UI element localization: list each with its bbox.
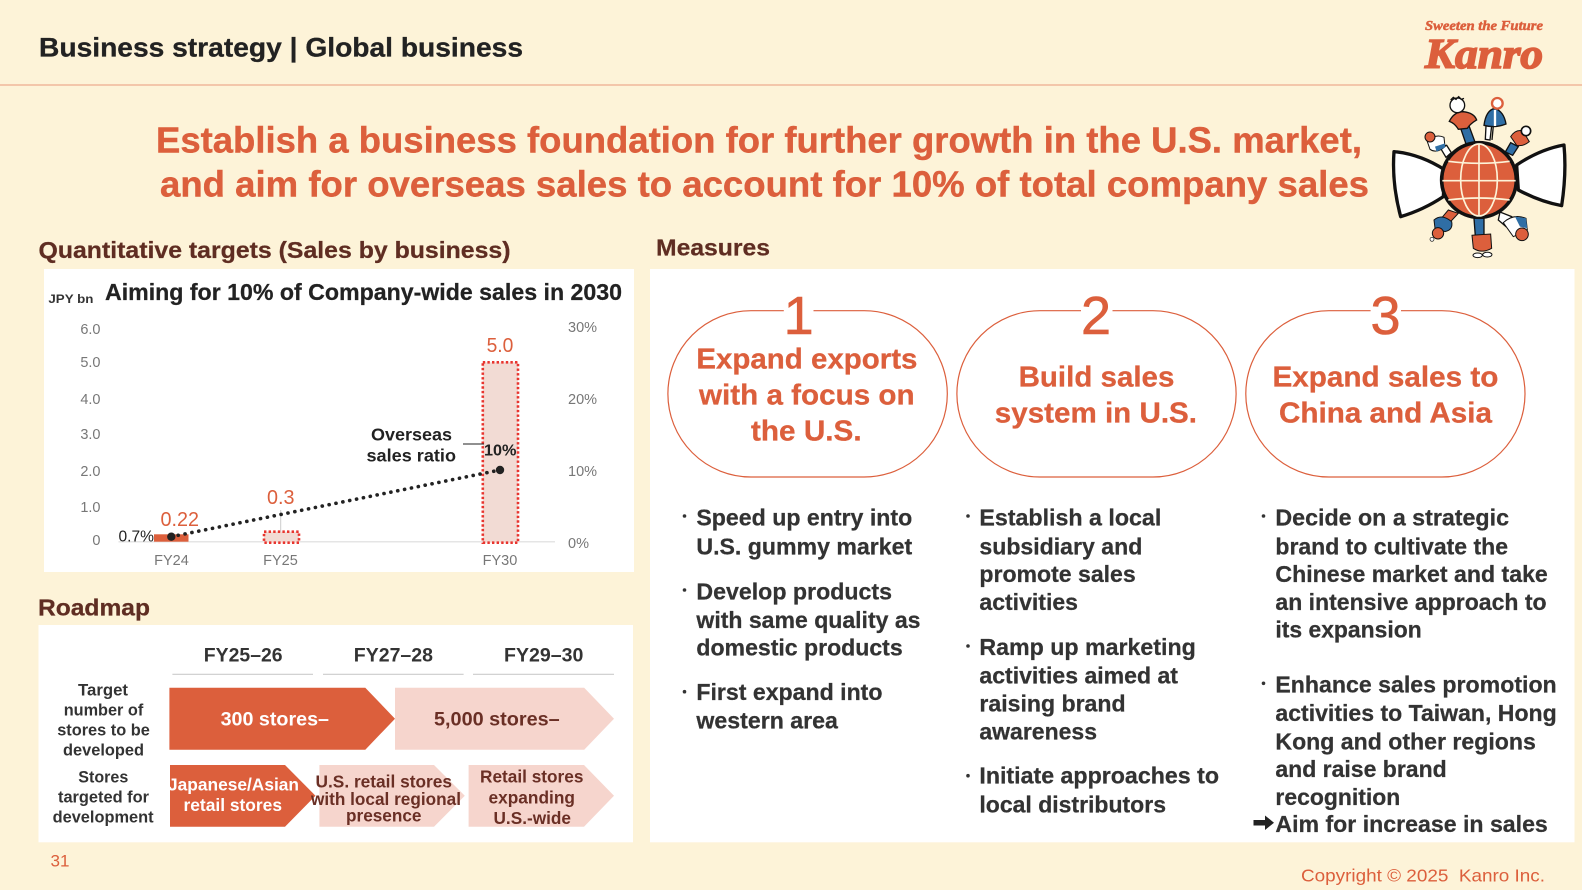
measure 2 bullets bbox=[966, 505, 1219, 818]
measure 3 bullets bbox=[1262, 505, 1557, 810]
copyright: Copyright © 2025 Kanro Inc. bbox=[1301, 866, 1545, 886]
measure 1 bullets: First expand into bbox=[696, 679, 882, 705]
bar: FY25 bbox=[264, 532, 299, 543]
bar: FY24 bbox=[154, 534, 188, 542]
icon: candy globe with people bbox=[1394, 97, 1565, 258]
page number: 31 bbox=[50, 852, 70, 870]
category labels: FY30 bbox=[483, 553, 517, 569]
headline bbox=[156, 120, 1369, 205]
measure 2 bullets: Establish a local bbox=[979, 505, 1161, 531]
row label: stores targeted: development bbox=[53, 808, 154, 826]
measure 1 header bbox=[668, 286, 947, 477]
row label: target number of stores bbox=[57, 682, 150, 759]
arrow: retail stores expanding: Retail stores bbox=[480, 766, 584, 786]
measure 2 header: 2 bbox=[1081, 286, 1111, 346]
measure 3 bullets: Decide on a strategic bbox=[1275, 505, 1509, 531]
measure 2 header: system in U.S. bbox=[995, 397, 1197, 429]
bar values: 0.3 bbox=[267, 487, 294, 509]
measure 3 bullets: Kong and other regions bbox=[1275, 728, 1536, 754]
measure 3 bullets: Enhance sales promotion bbox=[1275, 671, 1557, 697]
measure 2 header: Build sales bbox=[1019, 362, 1174, 394]
measure 1 header: Expand exports bbox=[696, 343, 917, 375]
arrow: Japanese/Asian retail stores: Japanese/Asian bbox=[168, 775, 299, 795]
roadmap period headers: FY27–28 bbox=[354, 645, 433, 667]
right axis labels: 0% bbox=[568, 536, 589, 552]
measure 2 bullets: raising brand bbox=[979, 690, 1126, 716]
right axis labels: 20% bbox=[568, 392, 597, 408]
bar values bbox=[160, 335, 513, 531]
measure 1 bullets: domestic products bbox=[696, 635, 903, 661]
measure 1 header: 1 bbox=[784, 286, 814, 346]
measure 3 bullets: its expansion bbox=[1275, 617, 1422, 643]
result text: Aim for increase in sales bbox=[1275, 811, 1548, 837]
arrow: U.S. retail stores: presence bbox=[346, 806, 422, 826]
arrow: 300 stores bbox=[169, 688, 395, 750]
right axis labels: 10% bbox=[568, 464, 597, 480]
measure 2 bullets: awareness bbox=[979, 718, 1097, 744]
measure 3 bullets: and raise brand bbox=[1275, 756, 1447, 782]
left axis labels bbox=[80, 322, 100, 549]
measure 1 bullets: U.S. gummy market bbox=[696, 533, 913, 559]
measure 1 header: the U.S. bbox=[751, 416, 862, 448]
row label: target number of stores: developed bbox=[63, 741, 144, 759]
measure 2 bullets: activities aimed at bbox=[979, 662, 1178, 688]
headline: and aim for overseas sales to account for 10% of total company sales bbox=[160, 164, 1369, 205]
category labels: FY24 bbox=[154, 553, 189, 569]
measure 2 bullets: promote sales bbox=[979, 561, 1136, 587]
arrow: Japanese/Asian retail stores bbox=[168, 765, 316, 827]
measure 1 bullets: Develop products bbox=[696, 578, 892, 604]
row label: target number of stores: Target bbox=[78, 682, 129, 700]
measure 3 header: Expand sales to bbox=[1272, 362, 1498, 394]
measure 2 bullets: subsidiary and bbox=[979, 533, 1142, 559]
measure 3 header: 3 bbox=[1370, 286, 1401, 346]
measure 1 bullets: western area bbox=[695, 708, 838, 734]
headline: Establish a business foundation for further growth in the U.S. market, bbox=[156, 120, 1362, 161]
left axis labels: 0 bbox=[92, 533, 100, 549]
measure 3 bullets: activities to Taiwan, Hong bbox=[1275, 700, 1557, 726]
chart title: Aiming for 10% of Company-wide sales in 2030 bbox=[105, 279, 622, 305]
measure 3 bullets: recognition bbox=[1275, 784, 1400, 810]
row label: target number of stores: number of bbox=[64, 701, 144, 719]
roadmap period headers: FY25–26 bbox=[204, 645, 283, 667]
measure 1 bullets: Speed up entry into bbox=[696, 505, 912, 531]
arrow: 300 stores: 300 stores– bbox=[221, 709, 329, 731]
row label: stores targeted: targeted for bbox=[58, 788, 150, 806]
chart unit: JPY bn bbox=[48, 292, 93, 306]
section heading: roadmap: Roadmap bbox=[38, 594, 150, 620]
section heading: measures: Measures bbox=[656, 235, 770, 261]
left axis labels: 6.0 bbox=[80, 322, 100, 338]
arrow: retail stores expanding bbox=[469, 765, 614, 828]
measure 3 bullets: an intensive approach to bbox=[1275, 589, 1547, 615]
measure 1 bullets bbox=[683, 505, 921, 734]
arrow: Japanese/Asian retail stores: retail stores bbox=[184, 795, 282, 815]
arrow: retail stores expanding: expanding bbox=[488, 787, 575, 807]
ratio label FY24: 0.7% bbox=[118, 529, 154, 546]
bar: FY30 bbox=[483, 362, 518, 543]
measure 3 header bbox=[1246, 286, 1525, 477]
bar values: 5.0 bbox=[487, 335, 513, 357]
left axis labels: 1.0 bbox=[80, 500, 100, 516]
measure 2 bullets: local distributors bbox=[979, 792, 1166, 818]
panel: sales chart bbox=[44, 269, 634, 572]
measure 2 bullets: activities bbox=[979, 589, 1078, 615]
arrow: 5,000 stores bbox=[395, 688, 614, 750]
right axis labels bbox=[568, 320, 597, 552]
arrow: 5,000 stores: 5,000 stores– bbox=[434, 709, 560, 731]
left axis labels: 5.0 bbox=[80, 355, 100, 371]
right axis labels: 30% bbox=[568, 320, 597, 336]
measure 3 bullets: brand to cultivate the bbox=[1275, 533, 1508, 559]
ratio label FY30: 10% bbox=[484, 443, 517, 460]
measure 3 header: China and Asia bbox=[1279, 397, 1493, 429]
left axis labels: 2.0 bbox=[80, 464, 100, 480]
bar values: 0.22 bbox=[160, 509, 199, 531]
callout: overseas sales ratio: sales ratio bbox=[366, 446, 456, 466]
roadmap period headers bbox=[172, 645, 614, 674]
callout: overseas sales ratio bbox=[366, 425, 484, 466]
left axis labels: 3.0 bbox=[80, 427, 100, 443]
arrow: retail stores expanding: U.S.-wide bbox=[494, 808, 571, 828]
row label: stores targeted bbox=[53, 769, 154, 826]
measure 1 bullets: with same quality as bbox=[695, 607, 921, 633]
arrow: U.S. retail stores: with local regional bbox=[310, 789, 461, 809]
panel: measures bbox=[650, 269, 1574, 842]
section heading: quantitative targets: Quantitative targets (Sales by business) bbox=[38, 237, 511, 263]
callout: overseas sales ratio: Overseas bbox=[371, 425, 452, 445]
category labels: FY25 bbox=[263, 553, 298, 569]
roadmap period headers: FY29–30 bbox=[504, 645, 584, 667]
arrow: U.S. retail stores bbox=[310, 765, 465, 827]
left axis labels: 4.0 bbox=[80, 392, 100, 408]
panel: roadmap bbox=[38, 625, 633, 842]
icon: result arrow bbox=[1254, 816, 1274, 830]
logo: Kanro: Sweeten the Future bbox=[1425, 19, 1543, 34]
category labels bbox=[154, 553, 517, 569]
measure 3 bullets: Chinese market and take bbox=[1275, 561, 1548, 587]
row label: stores targeted: Stores bbox=[78, 769, 128, 787]
row label: target number of stores: stores to be bbox=[57, 721, 150, 739]
arrow: U.S. retail stores: U.S. retail stores bbox=[316, 772, 452, 792]
logo: Kanro: Kanro bbox=[1424, 32, 1543, 78]
overseas sales ratio line bbox=[167, 466, 504, 541]
measure 2 bullets: Ramp up marketing bbox=[979, 634, 1196, 660]
measure 2 header bbox=[957, 286, 1236, 477]
measure 1 header: with a focus on bbox=[698, 379, 915, 411]
measure 2 bullets: Initiate approaches to bbox=[979, 763, 1219, 789]
page title: Business strategy | Global business bbox=[39, 32, 523, 62]
